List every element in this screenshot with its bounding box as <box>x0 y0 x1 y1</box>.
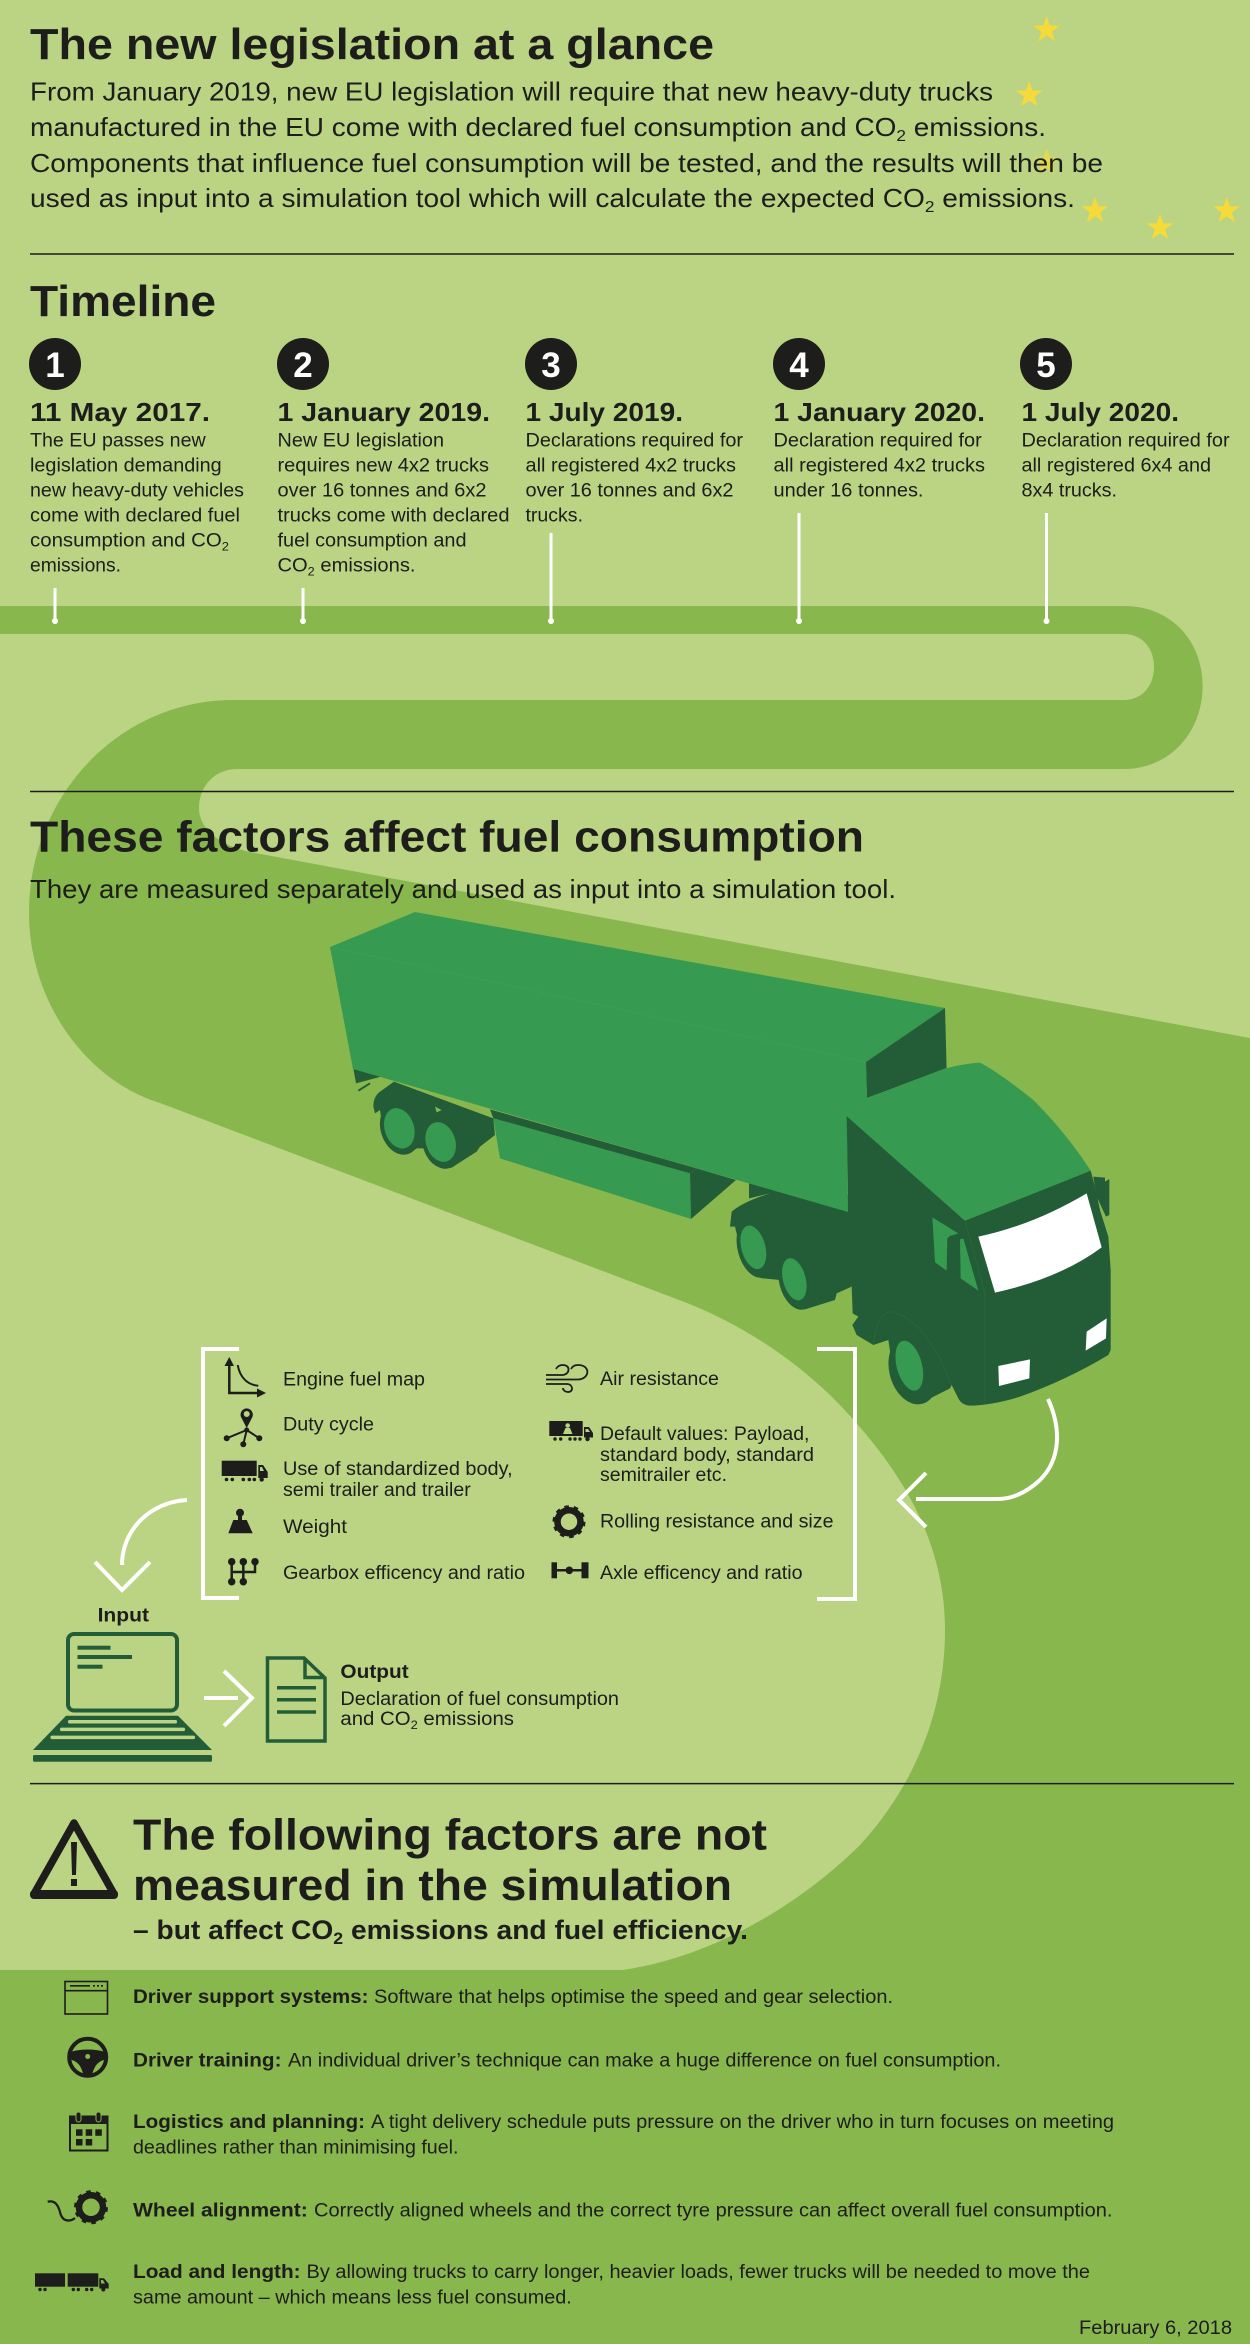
icon: standard truck <box>222 1461 268 1482</box>
timeline step 3: 1 July 2019. <box>526 397 683 427</box>
bracket left <box>203 1349 239 1598</box>
trailer undercarriage <box>353 1068 736 1219</box>
intro text block: used as input into a simulation tool which will calculate the expected CO <box>30 183 858 213</box>
load and length text: By allowing trucks to carry longer, heavier loads, fewer trucks will be needed to move the <box>306 2262 1090 2283</box>
timeline step 1: The EU passes new <box>30 430 206 452</box>
timeline step 4: under 16 tonnes. <box>774 480 924 502</box>
heading: not measured <box>133 1810 767 1948</box>
wheel alignment text: Wheel alignment: <box>133 2200 308 2221</box>
timeline step 2: fuel consumption and <box>278 530 466 552</box>
intro text block: 2 <box>896 128 906 145</box>
output text: Declaration of fuel consumption <box>340 1689 619 1710</box>
input factors right column <box>546 1365 834 1584</box>
timeline step 1: 11 May 2017. <box>30 397 210 427</box>
output text: emissions <box>418 1709 514 1730</box>
driver support systems text: Software that helps optimise the speed and gear selection. <box>374 1987 893 2008</box>
icon: wheel alignment <box>48 2192 106 2223</box>
output text: 2 <box>411 1718 418 1732</box>
input factors left column: Gearbox efficency and ratio <box>283 1563 525 1584</box>
bracket right <box>817 1349 855 1599</box>
trailer front face <box>866 1008 947 1098</box>
intro text block: Components that influence fuel consumption will be tested, and the results will then be <box>30 148 1103 178</box>
intro text block: 2 <box>925 199 935 216</box>
input factors left column <box>222 1357 525 1584</box>
output text: and CO <box>340 1709 406 1730</box>
timeline step 5: all registered 6x4 and <box>1022 456 1211 476</box>
icon: gearbox <box>229 1559 258 1584</box>
timeline step 2: requires new 4x2 trucks <box>278 456 489 476</box>
timeline step 1: legislation demanding <box>30 456 222 476</box>
timeline step 1: consumption and CO <box>30 530 208 552</box>
timeline step 2: trucks come with declared <box>278 506 510 526</box>
winding road background <box>0 606 1250 2344</box>
cab roof <box>847 1063 1091 1221</box>
timeline step 3: all registered 4x2 trucks <box>526 456 736 476</box>
windshield <box>978 1193 1102 1293</box>
timeline step 4: 4 <box>789 346 809 385</box>
input factors right column: Default values: Payload, <box>600 1424 809 1445</box>
load and length text: Load and length: <box>133 2262 301 2283</box>
timeline step 4: all registered 4x2 trucks <box>774 456 985 476</box>
timeline step 1: 1 <box>45 346 65 385</box>
icon: steering wheel <box>69 2039 106 2076</box>
truck illustration <box>330 912 1111 1410</box>
output text: Output <box>340 1662 409 1683</box>
icon: axle <box>552 1562 588 1578</box>
cab <box>847 1063 1111 1410</box>
load and length text: same amount – which means less fuel consumed. <box>133 2287 572 2308</box>
timeline step 4 <box>773 338 985 502</box>
input factors left column: Engine fuel map <box>283 1370 425 1391</box>
headlights <box>998 1359 1030 1386</box>
timeline step 2: 1 January 2019. <box>278 397 490 427</box>
input factors right column: semitrailer etc. <box>600 1465 727 1486</box>
timeline step 2: over 16 tonnes and 6x2 <box>278 480 486 502</box>
input factors right column: Rolling resistance and size <box>600 1512 834 1533</box>
timeline step 5 <box>1020 338 1230 502</box>
timeline step 1 <box>29 338 244 576</box>
timeline step 3 <box>525 338 744 526</box>
timeline step 5: 8x4 trucks. <box>1022 480 1117 502</box>
intro text block <box>30 76 1103 216</box>
heading: not measured: The following factors are not <box>133 1810 767 1859</box>
input factors left column: semi trailer and trailer <box>283 1480 471 1501</box>
timeline step 5: Declaration required for <box>1022 430 1230 452</box>
arrow to input <box>95 1500 187 1590</box>
timeline step 3: over 16 tonnes and 6x2 <box>526 480 734 502</box>
arrow to output <box>204 1671 252 1726</box>
timeline step 2: New EU legislation <box>278 430 444 452</box>
timeline step 2 <box>277 338 510 578</box>
icon: engine fuel map <box>224 1357 266 1398</box>
icon: computer <box>33 1634 212 1762</box>
date: February 6, 2018 <box>1079 2318 1232 2339</box>
timeline step 5: 5 <box>1036 346 1056 385</box>
intro text block: emissions. <box>934 183 1075 213</box>
factors subheading: They are measured separately and used as input into a simulation tool. <box>30 874 896 904</box>
icon: warning triangle <box>30 1823 118 1899</box>
timeline step 2: CO <box>278 556 306 576</box>
driver support systems text: Driver support systems: <box>133 1987 368 2008</box>
heading: not measured: measured in the simulation <box>133 1861 732 1910</box>
input factors left column: Weight <box>283 1517 348 1538</box>
icon: air resistance <box>546 1365 587 1392</box>
title: The new legislation at a glance <box>30 20 714 69</box>
heading: not measured: – but affect CO <box>133 1915 325 1945</box>
timeline pins <box>52 513 1050 624</box>
icon: calendar <box>69 2112 108 2150</box>
icon: document <box>268 1658 325 1741</box>
logistics and planning text <box>133 2112 1114 2158</box>
timeline step 5: 1 July 2020. <box>1022 397 1179 427</box>
timeline step 2: 2 <box>293 346 313 385</box>
timeline step 2: 2 <box>308 564 315 578</box>
heading: factors: These factors affect fuel consumption <box>30 812 864 862</box>
tractor rear axle <box>730 1177 857 1314</box>
logistics and planning text: deadlines rather than minimising fuel. <box>133 2137 458 2158</box>
output text <box>340 1662 619 1732</box>
wheel alignment text: Correctly aligned wheels and the correct tyre pressure can affect overall fuel consumption. <box>314 2200 1112 2221</box>
timeline step 1: come with declared fuel <box>30 506 240 526</box>
icon: default values truck <box>549 1421 593 1441</box>
input factors left column: Duty cycle <box>283 1415 374 1436</box>
EU stars <box>1016 16 1240 239</box>
driver training text: Driver training: <box>133 2051 282 2072</box>
icon: duty cycle <box>224 1408 262 1447</box>
intro text block: From January 2019, new EU legislation will require that new heavy-duty trucks <box>30 76 993 106</box>
icon: weight <box>228 1509 253 1533</box>
side windows <box>932 1217 958 1271</box>
input label: Input <box>98 1606 150 1627</box>
icon: rolling resistance gear <box>554 1507 584 1537</box>
intro text block: emissions. <box>906 112 1046 142</box>
driver training text: An individual driver’s technique can make a huge difference on fuel consumption. <box>288 2051 1001 2072</box>
logistics and planning text: A tight delivery schedule puts pressure on the driver who in turn focuses on meeting <box>371 2112 1114 2133</box>
timeline step 1: new heavy-duty vehicles <box>30 480 244 502</box>
load and length text <box>133 2262 1090 2308</box>
timeline step 1: emissions. <box>30 556 121 576</box>
trailer box <box>330 912 945 1212</box>
timeline step 4: 1 January 2020. <box>774 397 985 427</box>
timeline step 2: emissions. <box>315 556 416 576</box>
input factors right column: Axle efficency and ratio <box>600 1563 802 1584</box>
logistics and planning text: Logistics and planning: <box>133 2112 365 2133</box>
intro text block: manufactured in the EU come with declared fuel consumption and CO <box>30 112 835 142</box>
arrow from truck to inputs <box>899 1399 1057 1527</box>
timeline step 3: trucks. <box>526 506 583 526</box>
icon: long truck <box>35 2273 109 2292</box>
input factors left column: Use of standardized body, <box>283 1459 513 1480</box>
timeline step 1: 2 <box>222 540 229 554</box>
icon: browser window <box>65 1982 108 2014</box>
heading: not measured: 2 <box>333 1929 343 1948</box>
input factors right column: Air resistance <box>600 1369 719 1390</box>
heading: timeline: Timeline <box>30 277 216 326</box>
heading: not measured: emissions and fuel efficiency. <box>343 1915 748 1945</box>
timeline step 4: Declaration required for <box>774 430 982 452</box>
input factors right column: standard body, standard <box>600 1445 814 1466</box>
driver support systems text <box>133 1987 893 2008</box>
timeline step 3: Declarations required for <box>526 430 744 452</box>
timeline step 3: 3 <box>541 346 561 385</box>
